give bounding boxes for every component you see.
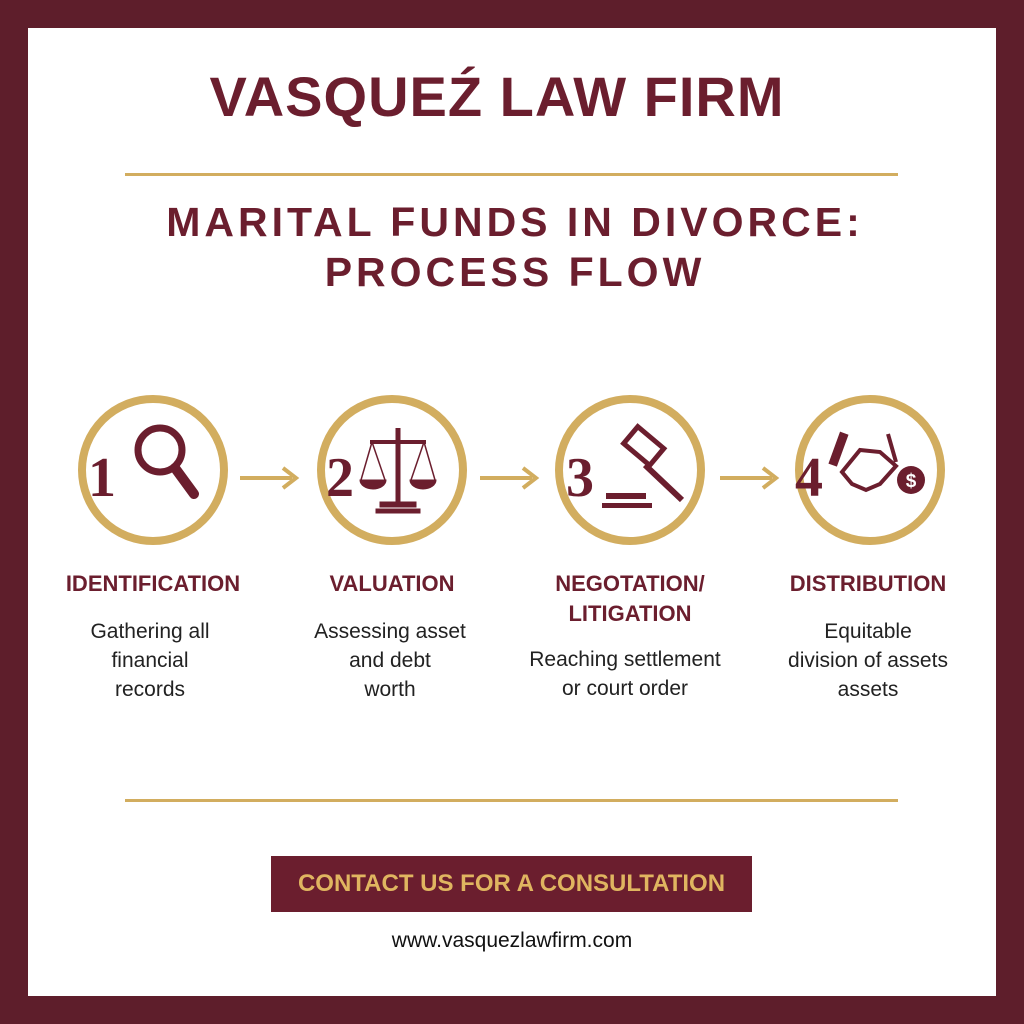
step labels	[66, 571, 948, 701]
arrow 2	[480, 468, 536, 488]
text: or court order	[562, 677, 688, 700]
step 1 icon: magnifier	[82, 399, 224, 541]
step 4 icon: handshake and dollar	[795, 399, 941, 541]
contact button	[271, 856, 752, 912]
step 3 icon: gavel	[559, 399, 701, 541]
arrow 1	[240, 468, 296, 488]
step 1 icon: magnifier: 1	[88, 447, 116, 509]
subtitle: PROCESS FLOW	[325, 249, 705, 295]
text: NEGOTATION/	[555, 571, 705, 596]
subtitle: MARITAL FUNDS IN DIVORCE:	[166, 199, 864, 245]
step 4 icon: handshake and dollar: $	[906, 471, 917, 492]
title: VASQUEŹ LAW FIRM	[210, 65, 784, 128]
text: IDENTIFICATION	[66, 571, 240, 596]
text: Reaching settlement	[529, 648, 721, 671]
contact button: CONTACT US FOR A CONSULTATION	[298, 870, 725, 897]
step 2 icon: scales: 2	[326, 447, 354, 509]
text: Equitable	[824, 620, 912, 643]
text: VALUATION	[329, 571, 455, 596]
website url: www.vasquezlawfirm.com	[392, 929, 632, 952]
text: division of assets	[788, 649, 948, 672]
process flow diagram	[78, 395, 945, 545]
arrow 3	[720, 468, 776, 488]
text: Gathering all	[90, 620, 210, 643]
text: records	[115, 678, 185, 701]
text: DISTRIBUTION	[790, 571, 946, 596]
text: financial	[111, 649, 189, 672]
step 2 icon: scales	[321, 399, 463, 541]
text: Assessing asset	[314, 620, 466, 643]
text: worth	[364, 678, 416, 701]
subtitle	[166, 199, 864, 295]
step 3 icon: gavel: 3	[566, 447, 594, 509]
text: and debt	[349, 649, 431, 672]
text: assets	[838, 678, 898, 701]
text: LITIGATION	[568, 601, 692, 626]
step 4 icon: handshake and dollar: 4	[795, 447, 823, 509]
